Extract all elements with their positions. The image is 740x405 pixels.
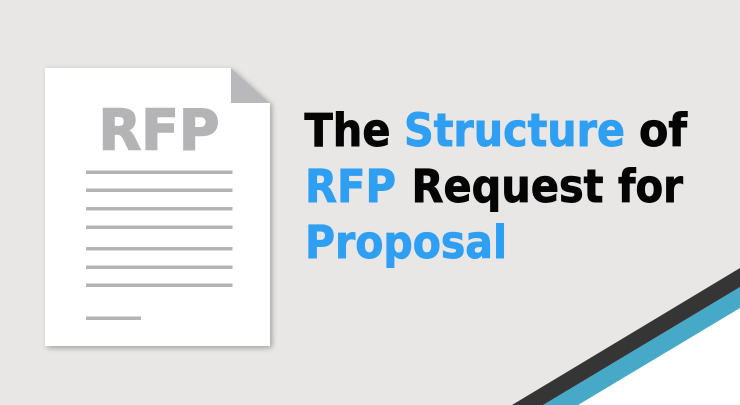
title: Structure (404, 104, 625, 157)
white corner (578, 308, 740, 405)
title: The (304, 104, 390, 157)
dark band (512, 268, 740, 405)
document page (45, 68, 270, 346)
page corner fold (231, 68, 270, 103)
icon: RFP document (45, 68, 270, 346)
title (304, 104, 687, 269)
document text lines (86, 170, 232, 320)
document label: RFP (98, 98, 220, 164)
corner decoration: diagonal bands (512, 268, 740, 405)
title: RFP (305, 160, 396, 213)
title: Proposal (305, 216, 507, 269)
title: Request (412, 160, 604, 213)
blue band (543, 287, 740, 405)
title: of (639, 104, 687, 157)
title: for (618, 160, 684, 213)
